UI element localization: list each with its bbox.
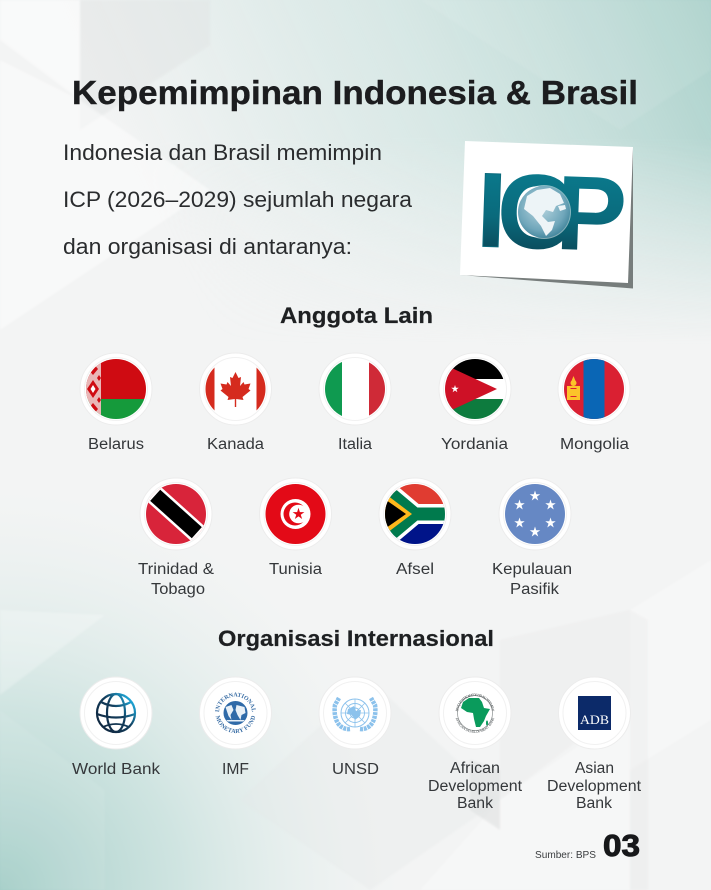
label: Asian Development Bank: Development <box>547 778 642 795</box>
logo: African Development Bank: BANQUE AFRICAINE DE DEVELOPPEMENT <box>456 694 494 712</box>
title: Kepemimpinan Indonesia & Brasil <box>72 74 638 111</box>
intro text: dan organisasi di antaranya: <box>63 234 352 259</box>
logo: IMF: MONETARY FUND <box>216 715 255 734</box>
label: Asian Development Bank: Bank <box>576 795 612 812</box>
logo: African Development Bank: AFRICAN DEVELOPMENT BANK <box>456 718 494 733</box>
label: Kepulauan Pasifik: Kepulauan <box>492 561 572 578</box>
flag: Tunisia <box>260 478 332 550</box>
logo: African Development Bank <box>440 678 510 748</box>
label: African Development Bank: African <box>450 760 500 777</box>
label: Trinidad & Tobago: Tobago <box>151 581 205 598</box>
source note: Sumber: BPS <box>535 849 596 861</box>
flag: Mongolia <box>558 353 630 425</box>
label: Italia: Italia <box>338 436 372 453</box>
icon: ICP logo sticker <box>460 141 633 288</box>
label: Mongolia: Mongolia <box>560 436 629 453</box>
icon: ICP logo sticker: C <box>495 152 576 272</box>
label: UNSD: UNSD <box>332 761 379 778</box>
intro text: Indonesia dan Brasil memimpin <box>63 140 382 165</box>
flag: Afsel <box>380 478 450 550</box>
page number: 03 <box>603 828 640 863</box>
logo: UNSD <box>319 677 391 749</box>
flag: Italia <box>319 353 391 425</box>
flag: Trinidad & Tobago <box>140 478 212 550</box>
label: African Development Bank: Bank <box>457 795 493 812</box>
label: Yordania: Yordania <box>441 436 508 453</box>
label: Tunisia: Tunisia <box>269 561 322 578</box>
label: African Development Bank <box>428 760 523 812</box>
label: Kepulauan Pasifik <box>492 561 572 598</box>
label: Afsel: Afsel <box>396 561 434 578</box>
label: African Development Bank: Development <box>428 778 523 795</box>
heading: Anggota Lain: Anggota Lain <box>280 303 433 328</box>
flag: Kepulauan Pasifik <box>499 478 571 550</box>
logo: Asian Development Bank <box>558 677 630 749</box>
logo: World Bank <box>80 677 152 749</box>
label: Asian Development Bank: Asian <box>575 760 614 777</box>
label: World Bank: World Bank <box>72 761 160 778</box>
icon: ICP logo sticker: P <box>554 154 629 274</box>
label: Asian Development Bank <box>547 760 642 812</box>
logo: IMF <box>199 678 271 749</box>
label: Belarus: Belarus <box>88 436 144 453</box>
intro text <box>63 140 413 259</box>
logo: IMF: INTERNATIONAL <box>215 692 256 712</box>
label: Trinidad & Tobago: Trinidad & <box>138 561 215 578</box>
label: Trinidad & Tobago <box>138 561 215 598</box>
intro text: ICP (2026–2029) sejumlah negara <box>63 187 413 212</box>
icon: ICP logo sticker: I <box>475 151 509 270</box>
logo: Asian Development Bank: ADB <box>580 712 609 727</box>
flag: Kanada <box>200 353 272 425</box>
flag: Yordania <box>439 353 511 425</box>
heading: Organisasi Internasional: Organisasi Internasional <box>218 626 494 651</box>
label: IMF: IMF <box>222 761 249 778</box>
flag: Belarus <box>80 353 152 425</box>
label: Kepulauan Pasifik: Pasifik <box>510 581 559 598</box>
label: Kanada: Kanada <box>207 436 264 453</box>
